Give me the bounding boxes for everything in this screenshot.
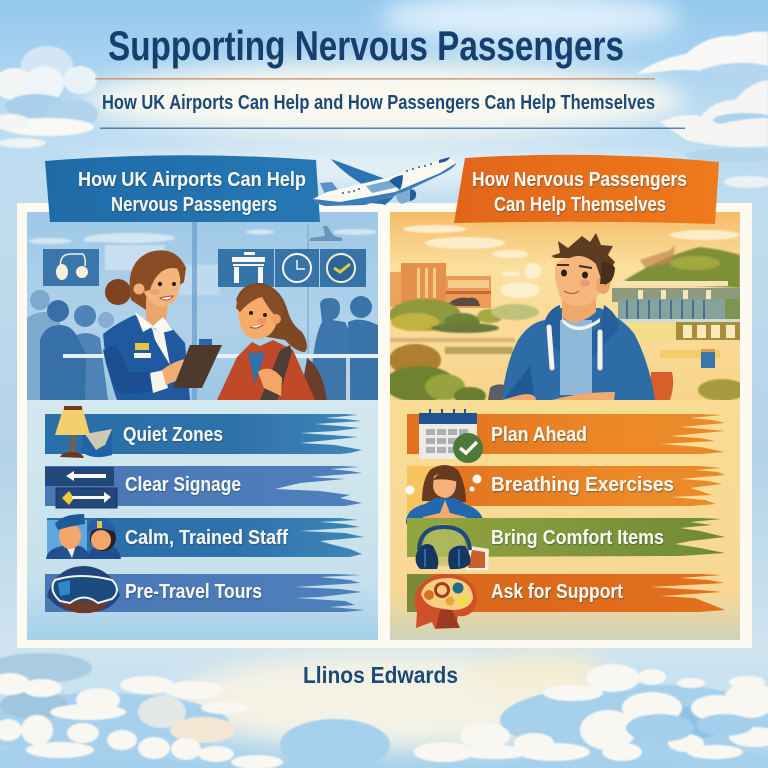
silhouettes: crowd right — [310, 296, 378, 400]
white frame — [17, 203, 752, 648]
banner text line one: How UK Airports Can Help — [78, 169, 306, 191]
clouds: bottom — [0, 653, 768, 768]
panel: airports help — [27, 212, 378, 640]
illustration: airport staff helping passenger — [27, 212, 378, 400]
figure: airport staff woman — [103, 250, 222, 400]
row: pre-travel tours — [45, 566, 365, 613]
panel background — [390, 400, 740, 640]
row: plan ahead — [407, 409, 725, 463]
silhouettes: crowd left — [27, 290, 114, 400]
panel: passengers help themselves — [384, 212, 746, 640]
icon: VR goggles — [47, 566, 120, 613]
subtitle: How UK Airports Can Help and How Passengers Can Help Themselves — [102, 92, 655, 114]
divider: bottom rule — [100, 128, 685, 129]
icon: two staff members — [46, 514, 121, 559]
title: Supporting Nervous Passengers — [108, 22, 624, 69]
icon: airplane — [313, 157, 456, 206]
row: calm, trained staff — [46, 514, 364, 559]
icon: direction signs — [45, 467, 117, 508]
figure: young man in hoodie — [488, 233, 673, 400]
banner text line one: How Nervous Passengers — [472, 169, 687, 191]
banner: passengers heading — [454, 155, 719, 224]
illustration: calm passenger at airport — [384, 212, 746, 405]
label: bring comfort items: Bring Comfort Items — [491, 526, 664, 549]
signs: gate, clock, check — [218, 249, 366, 287]
sign: headset — [43, 249, 99, 286]
label: pre-travel tours: Pre-Travel Tours — [125, 580, 262, 603]
banner: airports heading — [45, 155, 320, 222]
row: breathing exercises — [406, 465, 725, 524]
author name: Llinos Edwards — [303, 662, 458, 688]
clouds: upper right — [636, 32, 768, 188]
hill and trees right — [625, 245, 740, 288]
row: ask for support — [407, 574, 725, 629]
clouds: upper left — [0, 46, 98, 148]
icon: calendar with check — [419, 409, 483, 463]
divider: top rule — [95, 78, 655, 80]
label: quiet zones: Quiet Zones — [123, 423, 223, 446]
icon: head with gears — [414, 574, 477, 629]
buildings left — [390, 263, 491, 308]
icon: headphones and photo — [416, 524, 489, 570]
label: ask for support: Ask for Support — [491, 580, 623, 603]
trees left — [384, 299, 539, 405]
label: breathing exercises: Breathing Exercises — [491, 473, 674, 496]
banner text line two: Nervous Passengers — [111, 194, 277, 216]
label: clear signage: Clear Signage — [125, 473, 241, 496]
row: clear signage — [45, 466, 362, 508]
label: plan ahead: Plan Ahead — [491, 423, 587, 446]
icon: lamp and cushion — [55, 406, 112, 458]
figure: passenger girl — [217, 283, 327, 400]
terminal building right — [612, 281, 746, 401]
row: quiet zones — [45, 406, 362, 458]
row: bring comfort items — [407, 518, 725, 570]
icon: woman breathing calmly — [406, 465, 484, 524]
label: calm, trained staff: Calm, Trained Staff — [125, 526, 288, 549]
panel background — [27, 400, 378, 640]
banner text line two: Can Help Themselves — [494, 194, 666, 216]
